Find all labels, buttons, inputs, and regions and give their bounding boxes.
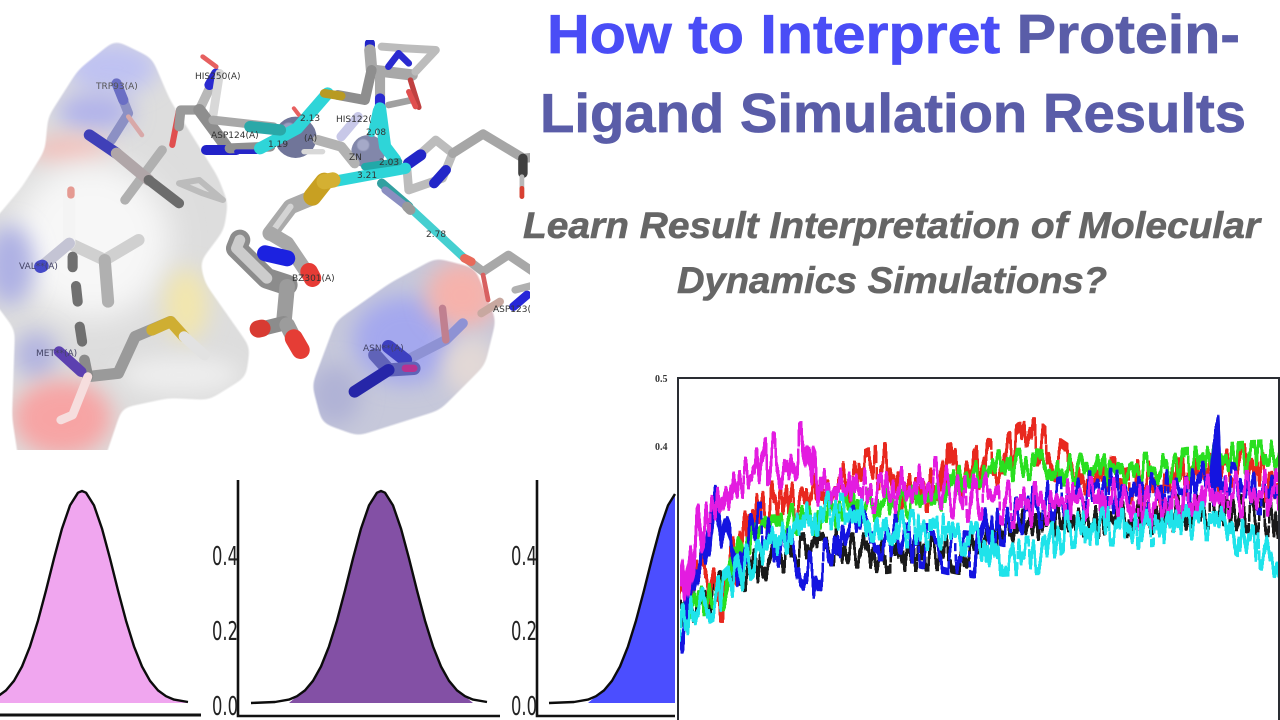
- coordination bonds: [250, 93, 471, 262]
- chart: pink distribution: [0, 491, 201, 715]
- series: green: [680, 455, 1279, 610]
- series: magenta: [680, 445, 1279, 605]
- subtitle line 2: Dynamics Simulations?: [677, 260, 1107, 301]
- atom: zinc 2: [351, 135, 385, 168]
- tick labels: [511, 542, 537, 720]
- residue: central gray sticks: [304, 117, 358, 163]
- residue and distance labels: 2.08: [366, 128, 386, 138]
- tick labels: [212, 542, 238, 720]
- residue and distance labels: TRP93(A): [95, 82, 138, 92]
- residue and distance labels: HIS250(A): [195, 72, 240, 82]
- chart: blue distribution: [511, 480, 675, 720]
- residue and distance labels: ZN: [349, 153, 362, 163]
- tick labels: 0.4: [511, 542, 537, 572]
- series: blue: [680, 430, 1279, 632]
- data series: [680, 430, 1279, 632]
- axis tick labels: [655, 374, 668, 453]
- tick labels: 0.2: [511, 617, 537, 647]
- residue: TRP93: [90, 83, 223, 203]
- y axis: [537, 480, 675, 716]
- residue: ASP123: [468, 255, 540, 313]
- surface: right pocket: [312, 259, 496, 435]
- residue and distance labels: 2.13: [300, 114, 320, 124]
- sticks and atoms: [41, 43, 540, 420]
- residue and distance labels: MET**(A): [36, 349, 77, 359]
- molecular structure image: [0, 0, 541, 480]
- atom: zinc 1: [275, 117, 317, 158]
- chart: purple distribution: [212, 480, 500, 720]
- residue: VAL: [41, 190, 138, 302]
- ligand: BZ301: [236, 180, 333, 350]
- series: cyan: [680, 510, 1279, 625]
- x axis: [0, 714, 201, 716]
- plot frame: [678, 378, 1279, 720]
- tick labels: 0.4: [212, 542, 238, 572]
- title: [540, 3, 1246, 144]
- area and curve: [588, 494, 675, 703]
- residue: MET: [59, 322, 204, 420]
- residue: top histidine: [338, 43, 436, 107]
- residue and distance labels: ASP124(A): [211, 131, 259, 141]
- residue and distance labels: BZ301(A): [292, 274, 335, 284]
- residue and distance labels: 3.21: [357, 171, 377, 181]
- residue and distance labels: ASP123(A): [493, 305, 541, 315]
- residue: right histidine: [407, 134, 540, 197]
- title line 1: How to Interpret Protein-: [547, 3, 1240, 65]
- tick labels: 0.2: [212, 617, 238, 647]
- series: black: [680, 510, 1279, 610]
- y axis: [238, 480, 500, 716]
- residue and distance labels: 1.19: [268, 140, 288, 150]
- residue and distance labels: ASN**(A): [363, 344, 404, 354]
- residue: HIS250 and ASP124: [172, 57, 299, 152]
- axis tick labels: 0.5: [655, 374, 668, 385]
- axis tick labels: 0.4: [655, 442, 668, 453]
- title line 2: Ligand Simulation Results: [540, 82, 1246, 144]
- area and curve: [0, 491, 188, 703]
- area and curve: [289, 491, 473, 703]
- residue and distance labels: VAL**(A): [19, 262, 58, 272]
- bond: dashed contact: [73, 257, 82, 342]
- chart: RMSD time series: [655, 374, 1279, 720]
- surface: left pocket: [0, 42, 250, 450]
- residue and distance labels: 2.03: [379, 158, 399, 168]
- subtitle line 1: Learn Result Interpretation of Molecular: [523, 205, 1263, 246]
- residue and distance labels: 2.78: [426, 230, 446, 240]
- residue and distance labels: HIS122(: [336, 115, 372, 125]
- residue: ASN: [355, 308, 463, 392]
- series: red: [680, 440, 1279, 605]
- residue and distance labels: [19, 72, 541, 359]
- subtitle: [523, 205, 1263, 301]
- residue and distance labels: (A): [304, 134, 317, 144]
